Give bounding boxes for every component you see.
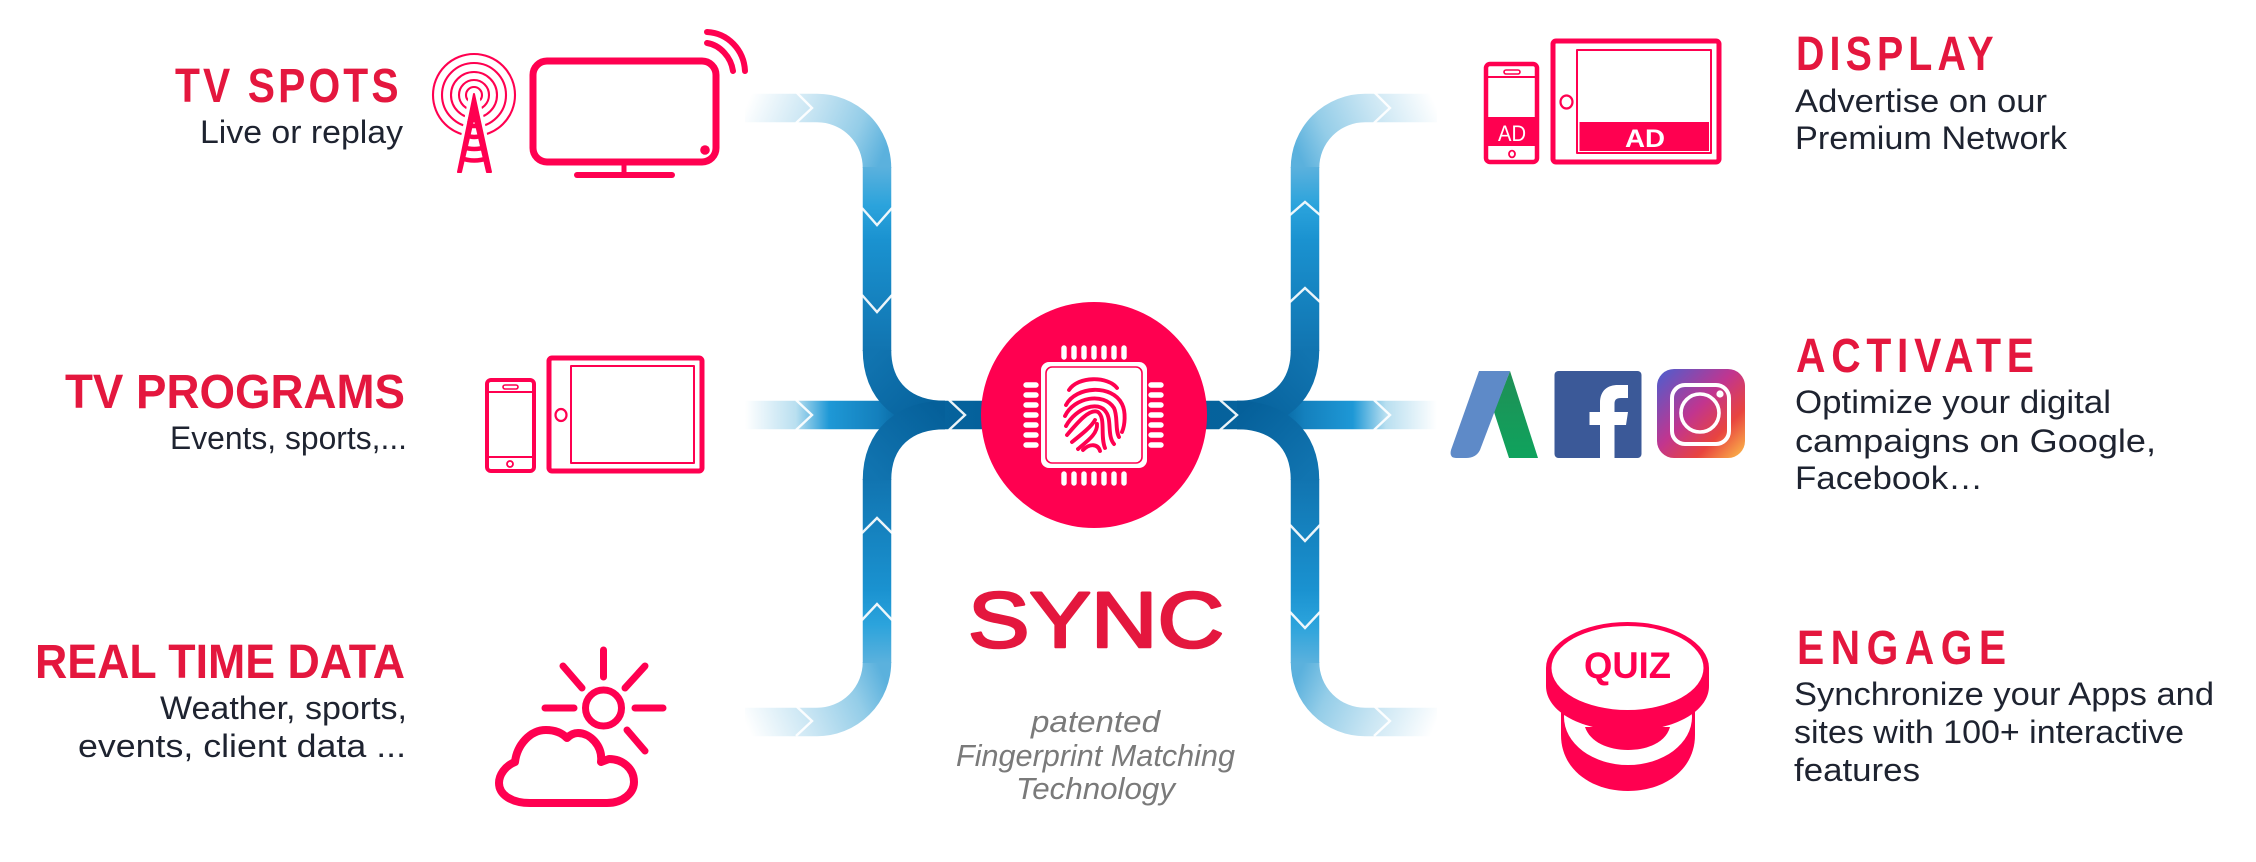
central hub: fingerprint chip (981, 302, 1207, 528)
text: weather, sports: Weather, sports, (160, 690, 407, 726)
icon: phone with ad: AD (1498, 121, 1526, 146)
icon: chip pins (1026, 348, 1161, 483)
icon: facebook (1554, 371, 1642, 458)
text: facebook: Facebook… (1795, 460, 1983, 496)
icon: phone and tablet (487, 358, 702, 471)
caption: patented technology: Technology (1016, 771, 1178, 806)
text: sites with: sites with 100+ interactive (1794, 714, 2184, 750)
pipe: bottom left input (745, 415, 945, 722)
heading: REAL TIME DATA: REAL TIME DATA (35, 636, 405, 689)
icon: quiz button: QUIZ (1584, 645, 1671, 686)
pipe: top right output (1237, 108, 1437, 415)
panel: TV spots (175, 32, 745, 175)
text: events, client data: events, client data ... (78, 728, 406, 764)
panel: TV programs (65, 358, 702, 471)
pipe: middle right output (1182, 401, 1437, 429)
heading: ACTIVATE: ACTIVATE (1796, 330, 2034, 383)
caption: patented technology (956, 704, 1235, 806)
heading: DISPLAY: DISPLAY (1796, 27, 1994, 81)
panel: display (1486, 27, 2068, 162)
text: optimize your digital: Optimize your digital (1795, 384, 2111, 420)
icon: tablet with ad: AD (1625, 125, 1665, 153)
text: synchronize: Synchronize your Apps and (1794, 676, 2214, 712)
icon: broadcast tower (433, 54, 515, 172)
icon: sun and cloud (499, 650, 663, 803)
icon: instagram (1657, 369, 1745, 458)
caption: patented technology: Fingerprint Matching (956, 738, 1235, 773)
text: events, sports: Events, sports,... (170, 420, 407, 456)
text: campaigns on google: campaigns on Google, (1795, 423, 2156, 459)
panel: engage (1546, 622, 2214, 791)
logo: SYNC: SYNC (968, 575, 1224, 664)
text: premium network: Premium Network (1795, 120, 2068, 156)
icon: quiz button (1546, 622, 1709, 791)
panel: real time data (35, 636, 663, 803)
icon: connected TV (533, 32, 745, 175)
pipe: top left input (745, 108, 945, 415)
icon: phone with ad (1486, 64, 1537, 162)
flow direction arrows (796, 92, 1390, 736)
icon: fingerprint (1065, 379, 1125, 451)
icon: chip body (1041, 362, 1147, 468)
caption: patented technology: patented (1030, 704, 1162, 739)
heading: TV SPOTS: TV SPOTS (175, 60, 399, 113)
heading: TV PROGRAMS: TV PROGRAMS (65, 366, 405, 419)
pipeline network (745, 108, 1437, 722)
icon: tablet with ad (1553, 41, 1719, 162)
panel: activate (1451, 330, 2156, 496)
icon: google ads (1451, 371, 1538, 458)
pipe: middle left input (745, 401, 1000, 429)
text: features: features (1794, 752, 1920, 788)
text: live or replay: Live or replay (200, 114, 403, 150)
heading: ENGAGE: ENGAGE (1797, 622, 2006, 675)
pipe: bottom right output (1237, 415, 1437, 722)
text: advertise on our: Advertise on our (1795, 83, 2047, 119)
